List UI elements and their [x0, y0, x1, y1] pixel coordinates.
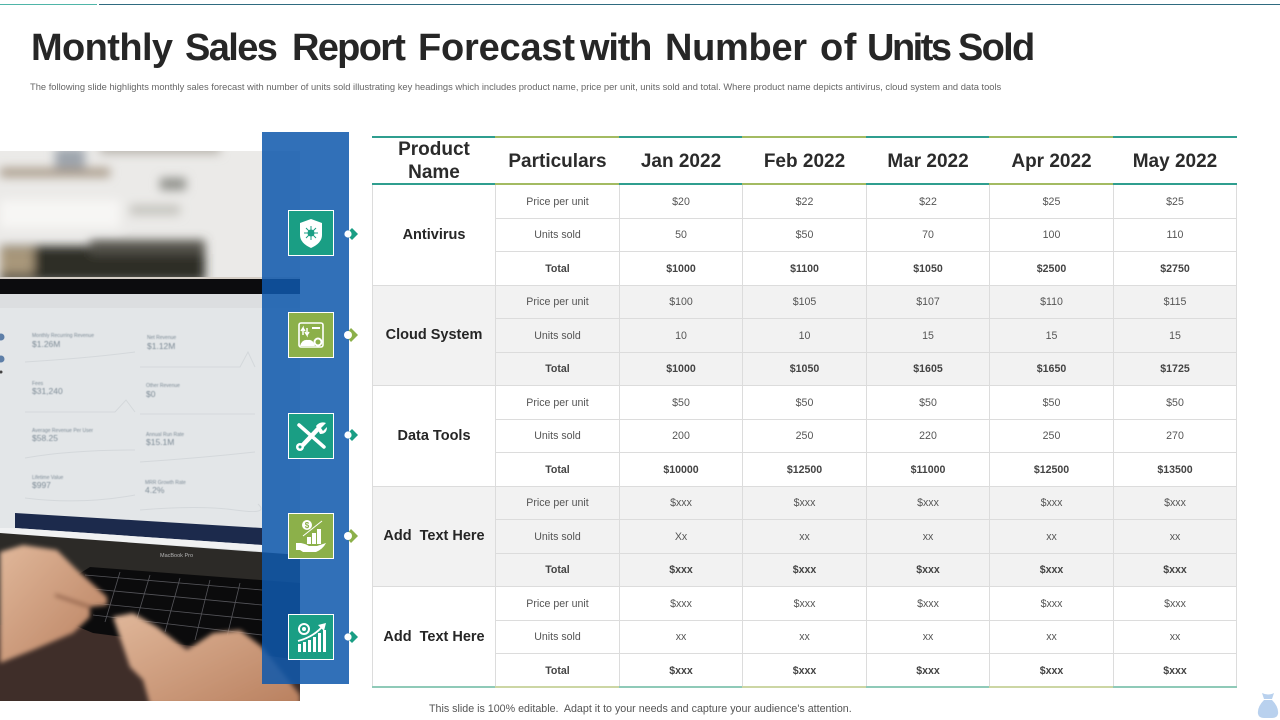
rows: antivirus: $1050	[913, 263, 943, 275]
rows: add text here one: Units sold	[534, 531, 581, 543]
rows: antivirus: 70	[922, 229, 934, 241]
icon: hand with growing money chart	[288, 513, 334, 559]
icon: rising bar chart with coin	[288, 614, 334, 660]
rows: cloud system: $1605	[913, 363, 943, 375]
rows: add text here one: xx	[1170, 531, 1180, 543]
photo: hands typing on laptop showing dashboard: Fees	[32, 381, 44, 387]
rows: add text here one: $xxx	[1163, 564, 1187, 576]
connector: cloud system	[344, 328, 358, 342]
rows: add text here two: xx	[1170, 631, 1180, 643]
photo: hands typing on laptop showing dashboard: MacBook Pro	[160, 553, 193, 559]
rows: antivirus	[403, 196, 1190, 275]
photo: hands typing on laptop showing dashboard: $15.1M	[146, 437, 174, 447]
rows: add text here one: $xxx	[1040, 564, 1063, 576]
rows: antivirus: $50	[796, 229, 813, 241]
rows: add text here two	[383, 598, 1187, 677]
photo: hands typing on laptop showing dashboard	[0, 151, 300, 701]
table header row: Mar 2022	[887, 150, 969, 172]
rows: data tools: $50	[672, 397, 690, 409]
title: Units	[867, 27, 950, 69]
title: Number	[665, 27, 807, 69]
photo: hands typing on laptop showing dashboard: Annual Run Rate	[146, 432, 184, 438]
rows: data tools: 220	[919, 430, 937, 442]
rows: antivirus: $1000	[666, 263, 696, 275]
rows: antivirus: $1100	[790, 263, 819, 275]
sales forecast table	[372, 139, 1237, 686]
connector: data tools	[344, 429, 358, 441]
rows: antivirus: $2500	[1037, 263, 1066, 275]
photo: hands typing on laptop showing dashboard: $31,240	[32, 386, 63, 396]
photo: hands typing on laptop showing dashboard: $1.12M	[147, 341, 175, 351]
rows: cloud system: 15	[1169, 330, 1181, 342]
rows: data tools: 270	[1166, 430, 1184, 442]
table header row: Jan 2022	[641, 150, 721, 172]
rows: data tools: Total	[545, 464, 570, 476]
photo: hands typing on laptop showing dashboard: Lifetime Value	[32, 475, 64, 481]
title	[31, 27, 1034, 69]
icon: wrench and screwdriver	[288, 413, 334, 459]
rows: antivirus: Price per unit	[526, 196, 589, 208]
rows: add text here two: xx	[676, 631, 686, 643]
top rule	[0, 4, 1280, 5]
rows: cloud system: $100	[669, 296, 693, 308]
table header row: Feb 2022	[764, 150, 845, 172]
rows: antivirus: $25	[1043, 196, 1060, 208]
rows: antivirus: $22	[919, 196, 937, 208]
rows: data tools: $50	[796, 397, 813, 409]
photo: hands typing on laptop showing dashboard: Average Revenue Per User	[32, 428, 93, 434]
rows: antivirus: 100	[1043, 229, 1060, 241]
rows: add text here two: Units sold	[534, 631, 581, 643]
rows: add text here two: $xxx	[1164, 598, 1186, 610]
rows: add text here one: $xxx	[1164, 497, 1186, 509]
rows: add text here two: xx	[799, 631, 810, 643]
rows: cloud system: 15	[922, 330, 934, 342]
rows: antivirus: Units sold	[534, 229, 581, 241]
table header row: May 2022	[1133, 150, 1217, 172]
rows: add text here one: $xxx	[794, 497, 815, 509]
rows: cloud system: 10	[675, 330, 687, 342]
rows: add text here two: $xxx	[669, 665, 693, 677]
icon: hand with growing money chart: $	[305, 521, 310, 530]
rows: add text here one	[373, 487, 1236, 586]
table header row: Particulars	[508, 150, 607, 172]
rows: add text here one: $xxx	[1041, 497, 1062, 509]
photo: hands typing on laptop showing dashboard: $1.26M	[32, 339, 60, 349]
title: Monthly	[31, 27, 172, 69]
rows: antivirus: Antivirus	[403, 227, 465, 243]
photo: hands typing on laptop showing dashboard: Other Revenue	[146, 383, 180, 389]
rows: data tools: Units sold	[534, 430, 581, 442]
rows: cloud system: $1000	[666, 363, 696, 375]
rows: data tools: $12500	[787, 464, 822, 476]
rows: cloud system: $105	[793, 296, 816, 308]
title: Sold	[958, 27, 1034, 69]
rows: cloud system: Total	[545, 363, 570, 375]
rows: cloud system: $1725	[1160, 363, 1190, 375]
title: of	[820, 27, 857, 69]
rows: data tools: $12500	[1034, 464, 1069, 476]
rows: add text here one: Total	[545, 564, 570, 576]
rows: cloud system: $107	[916, 296, 940, 308]
rows: add text here two: $xxx	[1163, 665, 1187, 677]
rows: data tools: Price per unit	[526, 397, 589, 409]
rows: data tools: $10000	[663, 464, 699, 476]
rows: add text here two: $xxx	[917, 598, 939, 610]
rows: data tools: $50	[1166, 397, 1184, 409]
title: Forecast	[418, 27, 575, 69]
table accent rules	[372, 136, 1237, 688]
rows: data tools	[397, 397, 1193, 476]
rows: antivirus: $25	[1166, 196, 1184, 208]
rows: add text here two: Add Text Here	[383, 629, 485, 645]
icon: cloud system control panel	[288, 312, 334, 358]
rows: cloud system: Units sold	[534, 330, 581, 342]
rows: cloud system: Price per unit	[526, 296, 589, 308]
rows: antivirus: $20	[672, 196, 690, 208]
rows: data tools: 200	[672, 430, 690, 442]
connector: antivirus	[344, 228, 358, 240]
table header row: Product	[398, 139, 470, 160]
rows: antivirus: $22	[796, 196, 813, 208]
icon: money bag	[1258, 693, 1278, 718]
rows: data tools: $11000	[911, 464, 945, 476]
rows: add text here one: xx	[1046, 531, 1057, 543]
blue vertical band	[262, 132, 349, 684]
rows: antivirus: 110	[1167, 229, 1183, 241]
rows: data tools: Data Tools	[397, 428, 471, 444]
rows: add text here two: Total	[545, 665, 570, 677]
rows: add text here two: Price per unit	[526, 598, 589, 610]
icon: shield antivirus	[288, 210, 334, 256]
photo: hands typing on laptop showing dashboard: 4.2%	[145, 485, 165, 495]
rows: add text here two: xx	[1046, 631, 1057, 643]
table header row: Name	[408, 162, 460, 183]
title: Sales	[185, 27, 276, 69]
rows: add text here one: $xxx	[670, 497, 692, 509]
connector: add text here one	[344, 529, 358, 543]
rows: add text here two: $xxx	[794, 598, 815, 610]
rows: cloud system	[373, 286, 1236, 385]
rows: data tools: $50	[919, 397, 937, 409]
rows: antivirus: $2750	[1160, 263, 1190, 275]
connector: add text here two	[344, 631, 358, 643]
rows: add text here one: Price per unit	[526, 497, 589, 509]
rows: add text here one: $xxx	[793, 564, 816, 576]
rows: add text here one: xx	[799, 531, 810, 543]
rows: add text here two: xx	[923, 631, 933, 643]
rows: cloud system: 15	[1046, 330, 1057, 342]
rows: cloud system: $115	[1164, 296, 1186, 308]
rows: add text here one: Xx	[675, 531, 687, 543]
table header row: Apr 2022	[1011, 150, 1092, 172]
rows: add text here two: $xxx	[1041, 598, 1062, 610]
rows: add text here two: $xxx	[1040, 665, 1063, 677]
rows: add text here one: xx	[923, 531, 933, 543]
title: Report	[292, 27, 404, 69]
rows: cloud system: Cloud System	[386, 327, 482, 343]
rows: add text here one: $xxx	[916, 564, 940, 576]
rows: cloud system: $110	[1040, 296, 1063, 308]
rows: cloud system: 10	[799, 330, 810, 342]
photo: hands typing on laptop showing dashboard: $997	[32, 480, 51, 490]
rows: data tools: 250	[796, 430, 813, 442]
rows: add text here two: $xxx	[916, 665, 940, 677]
photo: hands typing on laptop showing dashboard: $58.25	[32, 433, 58, 443]
title: with	[580, 27, 651, 69]
photo: hands typing on laptop showing dashboard: $0	[146, 389, 156, 399]
footer note: This slide is 100% editable. Adapt it to your needs and capture your audience's attention.	[429, 703, 852, 715]
rows: add text here two: $xxx	[793, 665, 816, 677]
rows: antivirus: 50	[675, 229, 687, 241]
photo: hands typing on laptop showing dashboard: Net Revenue	[147, 335, 176, 341]
table header row	[398, 139, 1217, 183]
photo: hands typing on laptop showing dashboard: Monthly Recurring Revenue	[32, 333, 94, 339]
rows: add text here one: $xxx	[917, 497, 939, 509]
rows: add text here one: $xxx	[669, 564, 693, 576]
rows: data tools: $13500	[1157, 464, 1193, 476]
rows: data tools: 250	[1043, 430, 1060, 442]
rows: cloud system: $1050	[790, 363, 819, 375]
rows: add text here one: Add Text Here	[383, 528, 485, 544]
subtitle description: The following slide highlights monthly sales forecast with number of units sold illustrating key headings which includes product name, price per unit, units sold and total. Where product name depicts antivirus, cloud system and data tools	[30, 82, 1001, 92]
photo: hands typing on laptop showing dashboard: MRR Growth Rate	[145, 480, 186, 486]
rows: antivirus: Total	[545, 263, 570, 275]
rows: add text here two: $xxx	[670, 598, 692, 610]
rows: data tools: $50	[1043, 397, 1060, 409]
rows: cloud system: $1650	[1037, 363, 1066, 375]
